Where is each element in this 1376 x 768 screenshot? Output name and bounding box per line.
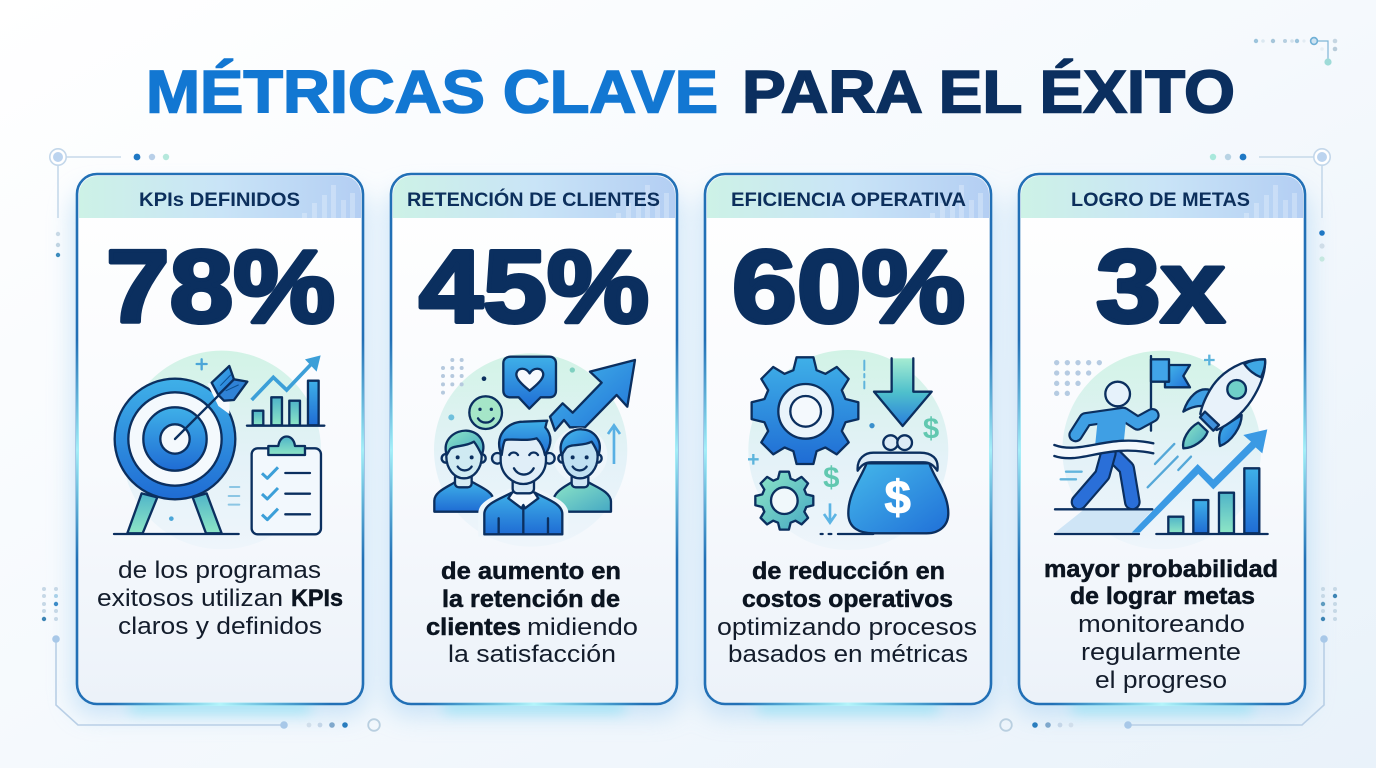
title: PARA EL ÉXITO — [742, 58, 1235, 126]
description: retención: midiendo — [527, 614, 638, 641]
title: MÉTRICAS CLAVE — [146, 58, 718, 126]
description: KPIs: de los programas — [118, 557, 321, 584]
description: eficiencia: basados en métricas — [728, 641, 968, 668]
heading: logro de metas: LOGRO DE METAS — [1071, 189, 1250, 211]
icon: gears, arrow and purse: $ — [923, 412, 939, 445]
panel: KPIs definidos — [76, 174, 364, 706]
decoration: top-right dots — [1254, 38, 1337, 66]
number: 3x: 3x — [1096, 229, 1225, 344]
description: metas: de lograr metas — [1070, 583, 1255, 610]
decoration: bottom-right circuit — [1000, 587, 1337, 731]
description: retención: la retención de — [442, 586, 620, 613]
description: metas: regularmente — [1081, 639, 1241, 666]
icon: gears, arrow and purse: $ — [823, 461, 839, 494]
panel: retención de clientes — [390, 174, 678, 706]
description: KPIs: KPIs — [291, 585, 343, 612]
description: eficiencia: de reducción en — [752, 558, 945, 585]
description: metas — [1044, 556, 1278, 694]
description: eficiencia: costos operativos — [742, 586, 953, 613]
description: metas: monitoreando — [1078, 611, 1245, 638]
description: KPIs — [97, 557, 343, 640]
description: metas: el progreso — [1095, 667, 1227, 694]
icon: gears, arrow and purse — [748, 350, 948, 550]
description: KPIs: claros y definidos — [118, 613, 322, 640]
number: 45%: 45% — [419, 229, 649, 344]
description: retención: clientes — [426, 614, 521, 641]
description: retención: de aumento en — [441, 558, 621, 585]
heading: eficiencia operativa: EFICIENCIA OPERATIVA — [731, 189, 966, 211]
decoration: top-right circuit — [1210, 149, 1330, 262]
decoration: top-left circuit — [50, 149, 169, 257]
description: retención — [426, 558, 638, 668]
panel: eficiencia operativa — [704, 174, 992, 706]
icon: gears, arrow and purse: $ — [884, 471, 911, 524]
number: 60%: 60% — [732, 229, 965, 344]
description: retención: la satisfacción — [448, 641, 616, 668]
heading: KPIs definidos: KPIs DEFINIDOS — [139, 189, 300, 211]
panel: logro de metas — [1018, 174, 1306, 706]
description: eficiencia: optimizando procesos — [717, 614, 977, 641]
card shadows — [72, 190, 1310, 716]
icon: happy customers — [434, 353, 635, 547]
icon: target, chart and checklist — [114, 351, 324, 549]
description: KPIs: exitosos utilizan — [97, 585, 283, 612]
title — [146, 58, 1235, 126]
description: metas: mayor probabilidad — [1044, 556, 1278, 583]
decoration: bottom-left circuit — [42, 587, 380, 731]
number: 78%: 78% — [106, 229, 335, 344]
description: eficiencia — [717, 558, 977, 668]
heading: retención de clientes: RETENCIÓN DE CLIENTES — [407, 187, 660, 211]
icon: runner, rocket and growth chart — [1054, 351, 1268, 549]
